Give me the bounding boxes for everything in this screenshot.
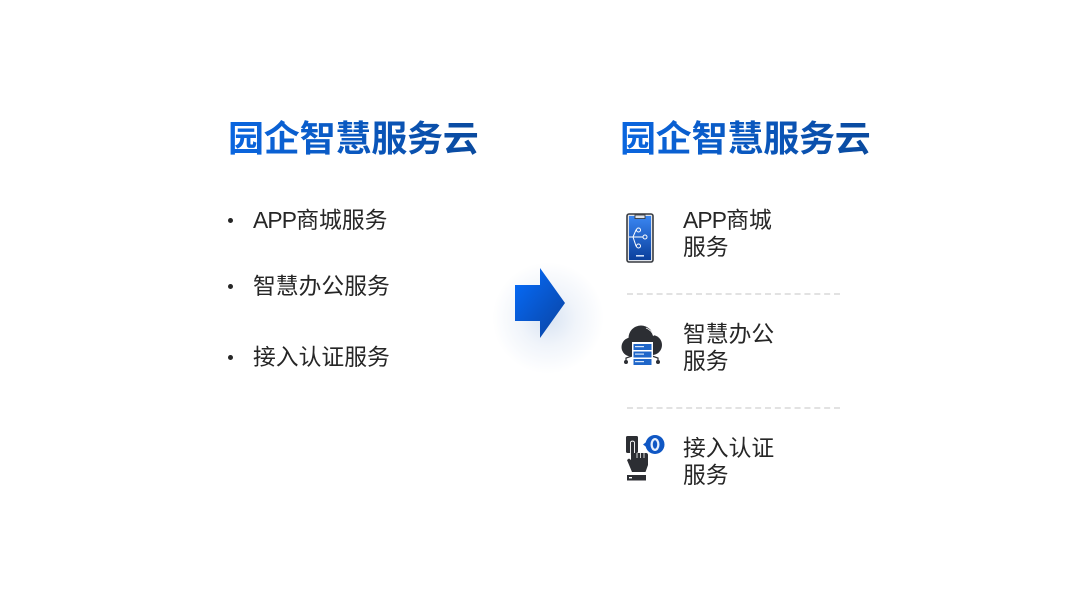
icon: cloud server xyxy=(622,326,662,365)
bullet item: 智慧办公服务: 智慧办公服务 xyxy=(253,273,390,299)
icon: finger touch with badge xyxy=(626,435,664,480)
label: APP商城服务: APP商城 xyxy=(683,207,772,233)
label: 智慧办公服务: 服务 xyxy=(683,348,729,374)
divider xyxy=(627,407,840,409)
divider xyxy=(627,293,840,295)
label: 接入认证服务: 服务 xyxy=(683,462,729,488)
label: APP商城服务: 服务 xyxy=(683,234,729,260)
label: APP商城服务 xyxy=(683,207,772,260)
icon: phone xyxy=(626,213,654,263)
bullet item: 接入认证服务: 接入认证服务 xyxy=(253,344,390,370)
arrow with glow xyxy=(508,268,588,358)
title: right column: 园企智慧服务云 xyxy=(620,118,871,159)
bullet item: APP商城服务: APP商城服务 xyxy=(253,207,387,233)
label: 接入认证服务: 接入认证 xyxy=(683,435,774,461)
label: 智慧办公服务 xyxy=(683,321,774,374)
label: 智慧办公服务: 智慧办公 xyxy=(683,321,774,347)
title: left column: 园企智慧服务云 xyxy=(228,118,479,159)
label: 接入认证服务 xyxy=(683,435,774,488)
